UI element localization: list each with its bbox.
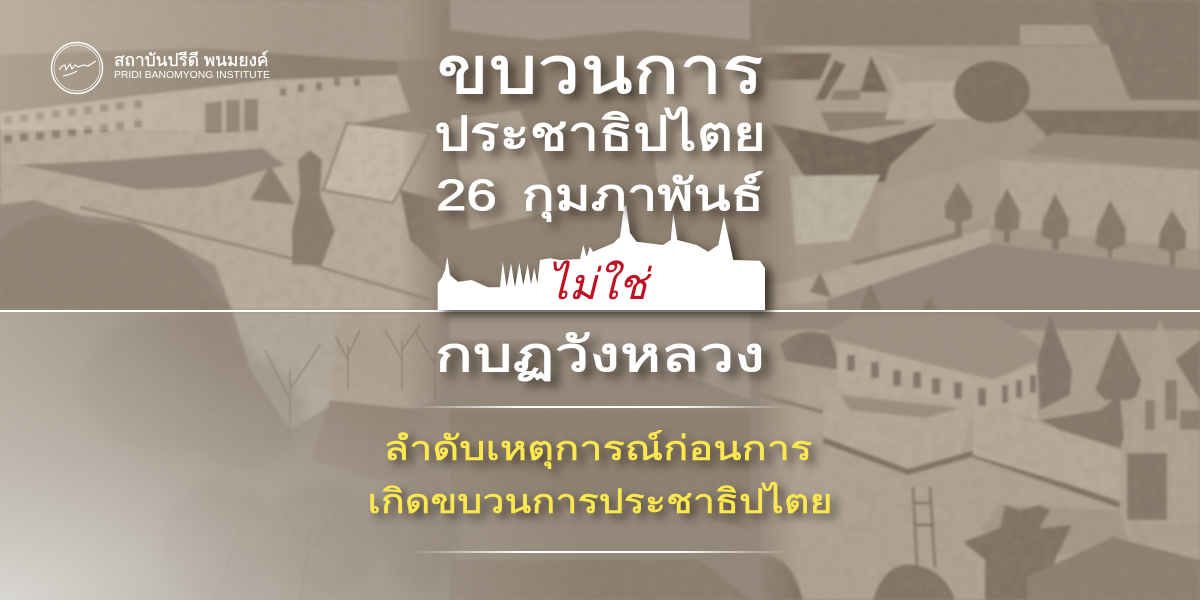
logo Thai name: สถาบันปรีดี พนมยงค์ [114, 50, 268, 70]
horizontal rule across page [0, 310, 1200, 312]
heading: palace rebellion: กบฏวังหลวง [435, 329, 765, 382]
lower right [760, 312, 1200, 600]
divider top [410, 406, 790, 408]
bare tree clusters, lower left [80, 310, 460, 600]
logo seal [50, 42, 104, 94]
lower center [400, 312, 800, 600]
title line 1: ขบวนการ [437, 33, 763, 107]
top center [400, 0, 800, 310]
lower left [0, 312, 440, 600]
upper right [760, 0, 1200, 310]
red label: not: ไม่ใช่ [547, 261, 647, 309]
subtitle line 2: เกิดขบวนการประชาธิปไตย [367, 483, 833, 521]
divider bottom [410, 551, 790, 553]
upper left [0, 0, 440, 60]
title line 3: 26 กุมภาพันธ์ [436, 171, 764, 220]
logo: Pridi Banomyong Institute [50, 42, 270, 94]
palace silhouette with red label [436, 205, 779, 322]
title line 2: ประชาธิปไตย [434, 108, 766, 161]
palace silhouette [436, 205, 779, 322]
subtitle line 1: ลำดับเหตุการณ์ก่อนการ [384, 430, 812, 468]
logo English name: PRIDI BANOMYONG INSTITUTE [114, 70, 270, 81]
